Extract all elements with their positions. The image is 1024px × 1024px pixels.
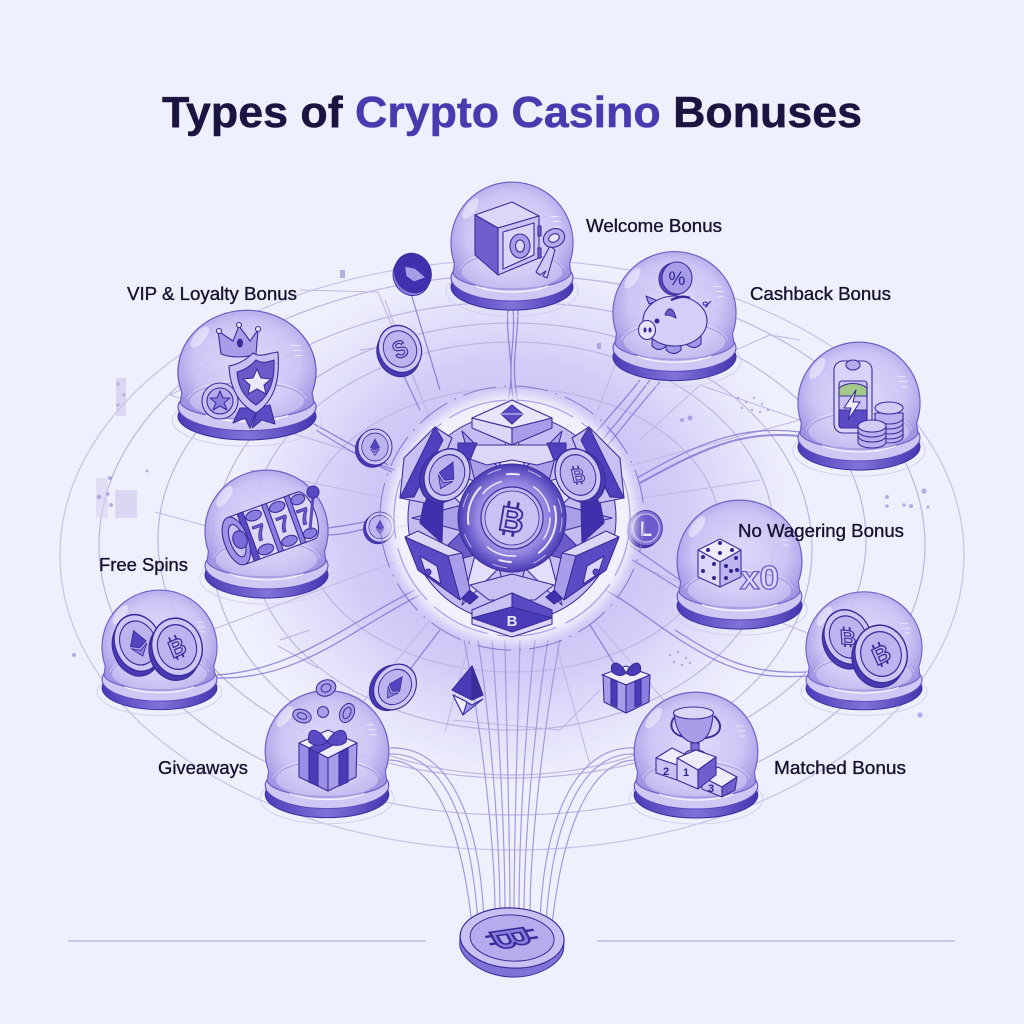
network background: rings and spokes bbox=[60, 250, 964, 850]
bottom bitcoin coin bbox=[458, 905, 566, 980]
icon: battery bbox=[834, 360, 872, 433]
bottom bitcoin coin: B bbox=[478, 924, 543, 952]
core bitcoin side coin: B bbox=[569, 464, 587, 487]
reel numbers bbox=[249, 502, 314, 547]
floating coin: small left bbox=[363, 512, 394, 544]
title: Types of Crypto Casino Bonuses bbox=[162, 88, 862, 137]
icon: gift box bbox=[299, 730, 357, 791]
dome: free spins slot machine bbox=[200, 470, 333, 604]
floating coin: dollar: S bbox=[388, 334, 412, 364]
core facets bbox=[412, 418, 612, 618]
core disc bbox=[408, 414, 616, 622]
reel numbers: 7 bbox=[249, 518, 270, 547]
icon: back coin: B bbox=[839, 626, 857, 650]
core bitcoin side coin bbox=[547, 440, 614, 512]
label: giveaways: Giveaways bbox=[158, 757, 248, 778]
core bitcoin coin bbox=[481, 487, 543, 549]
icon: podium: 3 bbox=[708, 783, 714, 795]
icon: podium: 1 bbox=[683, 767, 689, 779]
floating coin: bottom ethereum bbox=[361, 654, 425, 721]
floating icon: ethereum diamond bbox=[452, 666, 483, 715]
x0 multiplier: x0 bbox=[740, 559, 779, 596]
upper left slab bbox=[400, 427, 452, 503]
icon: btc coin: B bbox=[165, 632, 190, 663]
floating icon: gift bbox=[602, 663, 650, 713]
label: no wagering bonus: No Wagering Bonus bbox=[738, 520, 904, 541]
reel numbers: 7 bbox=[273, 509, 294, 538]
icon: slot reels bbox=[216, 489, 324, 569]
icon: percent coin: % bbox=[669, 269, 686, 290]
icon: key bbox=[536, 225, 568, 278]
icon: front coin: B bbox=[868, 639, 895, 671]
icon: dice bbox=[698, 539, 741, 587]
label: matched bonus: Matched Bonus bbox=[774, 757, 906, 778]
connector curves bbox=[217, 290, 806, 678]
footer divider lines bbox=[68, 940, 955, 942]
icon: piggy bbox=[638, 296, 711, 354]
dome: two bitcoin coins right bbox=[801, 592, 927, 715]
floating coin: dollar bbox=[368, 318, 430, 384]
lower left block bbox=[405, 531, 470, 600]
reel numbers: 7 bbox=[293, 502, 314, 531]
central crypto core bbox=[380, 386, 644, 650]
icon: star coin bbox=[202, 383, 238, 419]
dome: giveaways gift bbox=[260, 677, 394, 824]
icon: eth coin bbox=[103, 608, 171, 683]
label: cashback bonus: Cashback Bonus bbox=[750, 283, 891, 304]
dome: battery and coin stacks bbox=[793, 342, 925, 476]
label: free spins: Free Spins bbox=[99, 554, 188, 575]
fan of lines from bottom coin bbox=[388, 640, 636, 926]
core orb bbox=[458, 464, 566, 572]
floating coin: litecoin: L bbox=[640, 518, 652, 541]
floating coin: litecoin bbox=[627, 510, 662, 548]
icon: shield with ribbon bbox=[229, 352, 278, 428]
top block bbox=[472, 400, 552, 445]
icon: trophy bbox=[671, 707, 720, 758]
icon: floating coins bbox=[291, 677, 358, 725]
icon: coin stacks bbox=[858, 402, 903, 448]
upper right slab bbox=[572, 427, 624, 503]
label: welcome bonus: Welcome Bonus bbox=[586, 215, 722, 236]
icon: crown bbox=[216, 322, 260, 357]
icon: lever bbox=[307, 486, 319, 530]
lower right block bbox=[554, 531, 619, 600]
bottom block bbox=[472, 593, 552, 637]
dome: welcome bonus safe and key bbox=[446, 182, 578, 316]
dome: cashback bonus piggy bank bbox=[608, 252, 741, 387]
dome: no wagering dice bbox=[672, 500, 807, 635]
label: VIP and loyalty bonus: VIP & Loyalty Bonus bbox=[127, 283, 297, 304]
dome: matched bonus trophy bbox=[629, 692, 763, 824]
dome: VIP and loyalty crown and shield bbox=[172, 310, 322, 446]
central crypto core: B bbox=[496, 500, 527, 542]
core glow bbox=[388, 394, 636, 642]
core ethereum coin bbox=[411, 440, 478, 512]
dome: ethereum and bitcoin coins left bbox=[97, 590, 222, 715]
icon: safe bbox=[475, 202, 541, 275]
bottom block: B bbox=[507, 613, 518, 630]
floating coin: dark ethereum bbox=[386, 247, 439, 302]
floating coin: left ethereum bbox=[355, 429, 392, 467]
icon: podium: 2 bbox=[663, 766, 669, 778]
icon: podium bbox=[656, 748, 737, 797]
decorative data dots bbox=[72, 270, 930, 718]
